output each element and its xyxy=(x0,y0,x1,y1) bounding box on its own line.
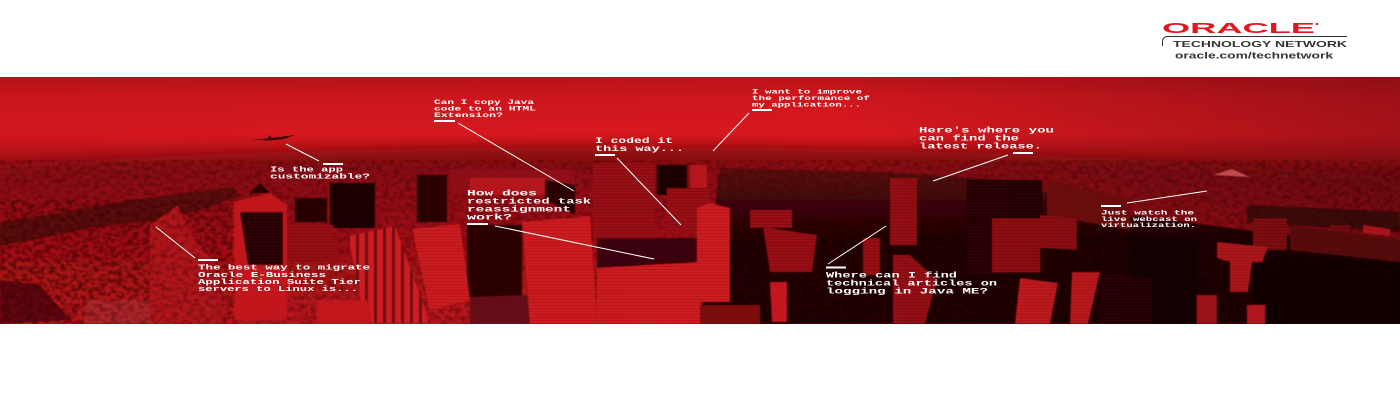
callout: restricted task reassignment xyxy=(467,188,654,259)
callout: restricted task reassignment: reassignment xyxy=(467,204,571,214)
logo subtitle: TECHNOLOGY NETWORK xyxy=(1173,39,1348,49)
distant city ground xyxy=(0,148,1400,350)
skyline buildings xyxy=(85,163,1400,324)
callout: live webcast: Just watch the xyxy=(1101,210,1194,216)
callout: migrate to Linux: The best way to migrate xyxy=(198,264,371,272)
callout: restricted task reassignment: restricted task xyxy=(467,196,591,206)
dark central and right skyline mass xyxy=(700,168,1400,324)
callout: live webcast xyxy=(1101,191,1207,229)
callout: latest release: latest release. xyxy=(919,141,1042,151)
callout: migrate to Linux: Application Suite Tier xyxy=(198,279,362,287)
logo: Oracle Technology Network xyxy=(1162,20,1348,62)
callout: improve performance: I want to improve xyxy=(752,88,862,96)
callout: coded it this way: this way... xyxy=(595,144,684,154)
callout: technical articles xyxy=(826,226,997,296)
callout: app customizable: Is the app xyxy=(270,166,344,174)
panel: red city photo band xyxy=(0,77,1400,350)
callout: restricted task reassignment: work? xyxy=(467,212,512,222)
city texture xyxy=(0,160,1400,324)
river left xyxy=(0,187,240,246)
callout: copy Java code: Extension? xyxy=(434,112,503,119)
dark lower left corner xyxy=(0,280,70,324)
logo wordmark: ORACLE xyxy=(1162,20,1315,37)
texture over left foreground xyxy=(0,200,235,324)
callout: copy Java code: Can I copy Java xyxy=(434,99,534,106)
callout: improve performance xyxy=(713,88,870,151)
river right xyxy=(1247,205,1400,232)
callout: technical articles: logging in Java ME? xyxy=(826,286,988,296)
callout: coded it this way: I coded it xyxy=(595,136,673,146)
callout: technical articles: technical articles on xyxy=(826,278,997,288)
callout: latest release: Here's where you xyxy=(919,125,1054,135)
callout: migrate to Linux: servers to Linux is... xyxy=(198,286,358,294)
sky xyxy=(0,77,1400,197)
logo bracket xyxy=(1162,36,1347,46)
callout: copy Java code xyxy=(434,99,574,191)
callout: app customizable: customizable? xyxy=(270,174,371,182)
callout: migrate to Linux: Oracle E-Business xyxy=(198,272,327,280)
callout: copy Java code: code to an HTML xyxy=(434,106,536,112)
callout: coded it this way xyxy=(595,136,684,225)
callout: app customizable xyxy=(270,144,371,182)
callout: live webcast: live webcast on xyxy=(1101,216,1197,223)
side shading xyxy=(932,77,1400,324)
callout: improve performance: the performance of xyxy=(752,95,870,102)
callout: live webcast: virtualization. xyxy=(1101,222,1196,229)
far mountain highlight xyxy=(1213,169,1250,177)
callout: latest release: can find the xyxy=(919,133,1019,143)
callout: migrate to Linux xyxy=(156,227,371,294)
callout: improve performance: my application... xyxy=(752,102,861,108)
icon: airplane xyxy=(252,135,295,140)
callout: latest release xyxy=(919,125,1054,181)
logo registered mark xyxy=(1316,23,1318,25)
logo url: oracle.com/technetwork xyxy=(1175,50,1334,62)
callout: restricted task reassignment: How does xyxy=(467,188,537,198)
callout: technical articles: Where can I find xyxy=(826,270,957,280)
